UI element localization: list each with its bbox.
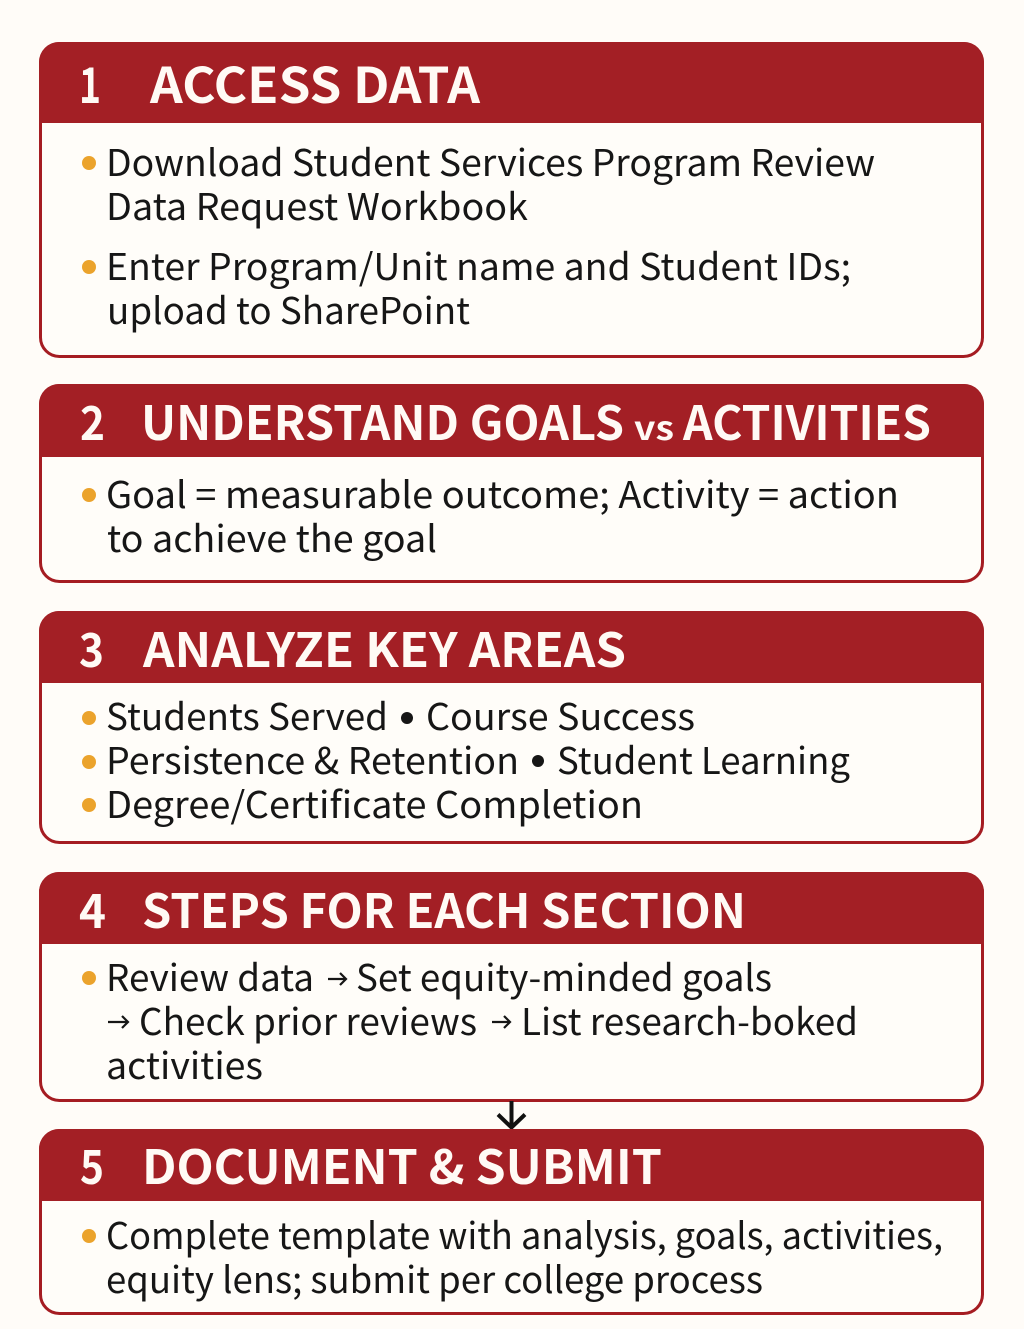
- text: key areas list: Persistence & Retention: [106, 732, 519, 785]
- heading: 2 understand goals vs activities: ACTIVITIES: [682, 385, 931, 454]
- heading: 2 understand goals vs activities: vs: [634, 402, 674, 450]
- bullet icon: [82, 488, 96, 502]
- heading: 5 document and submit: [39, 1129, 984, 1201]
- text: key areas list: Course Success: [426, 688, 695, 741]
- panel: step 2 goals vs activities: [39, 384, 984, 582]
- panel: step 5 document and submit: [39, 1129, 984, 1314]
- text: review steps: Set equity-minded goals: [356, 949, 772, 1002]
- panel: step 1 access data: [39, 42, 984, 356]
- bullet icon: [82, 260, 96, 274]
- bullet icon: [82, 755, 96, 769]
- text: key areas list: Students Served: [106, 688, 388, 741]
- text: download workbook: [106, 134, 875, 231]
- text: key areas list: Student Learning: [557, 732, 850, 785]
- bullet icon: [82, 156, 96, 170]
- heading: 3 analyze key areas: [39, 611, 984, 683]
- heading: 4 steps for each section: STEPS FOR EACH SECTION: [142, 873, 746, 942]
- text: complete template: equity lens; submit per college process: [106, 1251, 763, 1304]
- heading: 5 document and submit: DOCUMENT & SUBMIT: [142, 1129, 662, 1198]
- text: enter program name: Enter Program/Unit name and Student IDs;: [106, 238, 851, 291]
- text: review steps: [106, 949, 858, 1090]
- text: review steps: Check prior reviews: [139, 993, 477, 1046]
- text: review steps: Review data: [106, 949, 314, 1002]
- text: enter program name: upload to SharePoint: [107, 282, 470, 335]
- text: key areas list: Degree/Certificate Completion: [106, 776, 643, 829]
- text: goal definition: Goal = measurable outcome; Activity = action: [106, 466, 899, 519]
- text: download workbook: Data Request Workbook: [106, 178, 528, 231]
- text: goal definition: [106, 466, 899, 563]
- bullet icon: [82, 1229, 96, 1243]
- heading: 1 access data: [39, 42, 984, 123]
- heading: 4 steps for each section: [39, 872, 984, 944]
- text: key areas list: [106, 688, 850, 829]
- panel: step 3 analyze key areas: [39, 611, 984, 842]
- arrow: step 4 to step 5: [498, 1101, 525, 1128]
- panel: step 4 steps for each section: [39, 872, 984, 1100]
- heading: 2 understand goals vs activities: [39, 384, 984, 457]
- heading: 2 understand goals vs activities: 2: [80, 385, 105, 454]
- text: review steps: activities: [106, 1037, 263, 1090]
- text: review steps: List research-boked: [521, 993, 858, 1046]
- text: complete template: [106, 1207, 943, 1304]
- bullet icon: [82, 798, 96, 812]
- bullet icon: [82, 971, 96, 985]
- text: download workbook: Download Student Services Program Review: [106, 134, 875, 187]
- heading: 2 understand goals vs activities: UNDERSTAND GOALS: [141, 385, 624, 454]
- text: complete template: Complete template with analysis, goals, activities,: [106, 1207, 943, 1260]
- text: goal definition: to achieve the goal: [107, 510, 437, 563]
- heading: 1 access data: ACCESS DATA: [149, 47, 481, 118]
- text: enter program name: [106, 238, 851, 335]
- heading: 1 access data: 1: [79, 47, 101, 118]
- heading: 3 analyze key areas: ANALYZE KEY AREAS: [142, 612, 626, 681]
- heading: 3 analyze key areas: 3: [79, 612, 104, 681]
- heading: 4 steps for each section: 4: [79, 873, 106, 942]
- heading: 5 document and submit: 5: [80, 1129, 104, 1198]
- bullet icon: [82, 711, 96, 725]
